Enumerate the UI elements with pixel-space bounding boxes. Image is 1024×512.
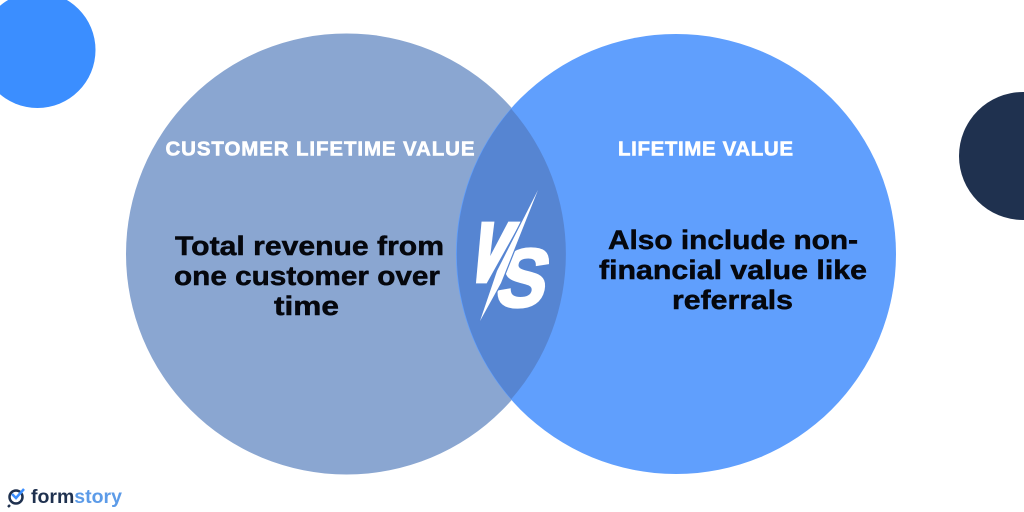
text block: customer lifetime value definition: Total revenue from [175, 231, 444, 261]
text block: lifetime value definition: referrals [672, 285, 793, 315]
letter V: V [460, 209, 522, 297]
text block: customer lifetime value definition: time [274, 291, 339, 321]
text block: customer lifetime value definition [174, 231, 444, 321]
decorative blue circle top left [0, 0, 96, 108]
icon: versus mark [460, 190, 559, 324]
decorative navy circle right [959, 92, 1024, 220]
text block: lifetime value definition: Also include non- [608, 225, 858, 255]
text block: customer lifetime value definition: one customer over [174, 261, 441, 291]
heading: lifetime value: LIFETIME VALUE [618, 138, 794, 160]
text block: lifetime value definition [599, 225, 867, 315]
logo wordmark: formstory [31, 487, 122, 508]
panel: lifetime value circle [456, 34, 896, 474]
text block: lifetime value definition: financial value like [599, 255, 867, 285]
letter S: S [490, 231, 559, 324]
heading: customer lifetime value: CUSTOMER LIFETIME VALUE [166, 138, 476, 160]
slash [480, 190, 538, 321]
panel: overlap lens [457, 109, 566, 399]
panel: customer lifetime value circle [126, 34, 567, 474]
icon: logo check badge [8, 489, 24, 507]
logo: formstory [8, 487, 122, 508]
